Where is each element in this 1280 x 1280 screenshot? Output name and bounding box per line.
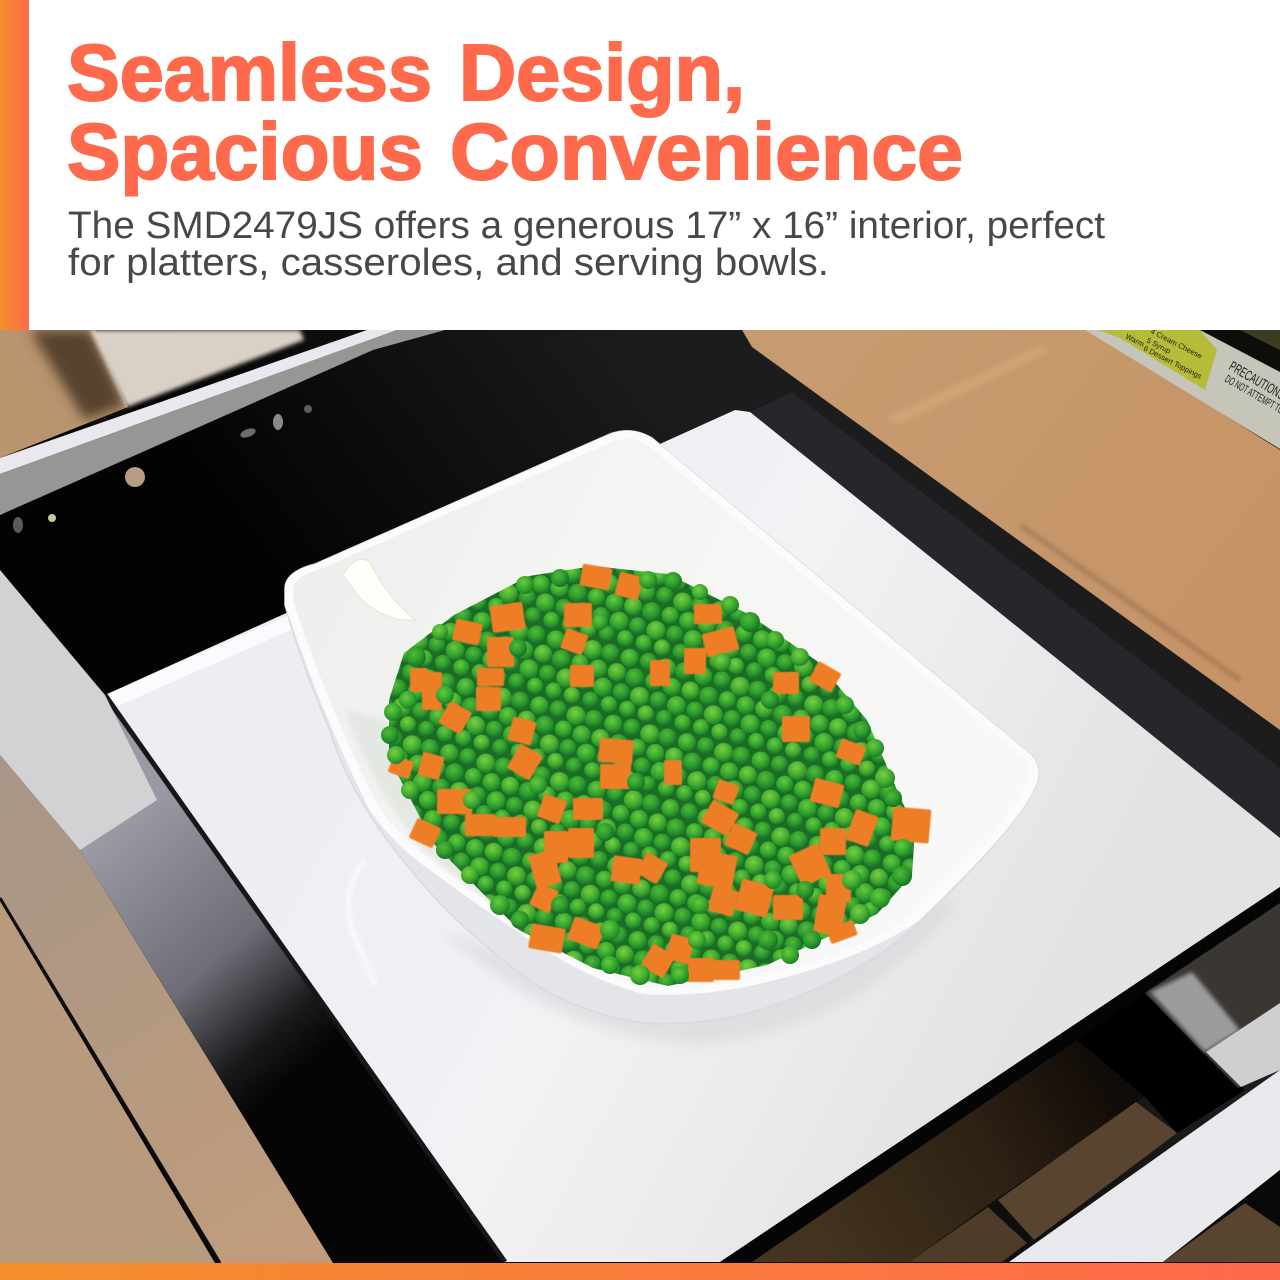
tray reflection xyxy=(348,860,375,985)
brown below drawer edge xyxy=(1163,1203,1280,1262)
bottom accent bar xyxy=(0,1263,1280,1280)
title: Spacious xyxy=(67,107,423,196)
steel rail white edge xyxy=(0,330,397,474)
steel hinge bright lower xyxy=(1206,1003,1280,1087)
blurred printing on cardboard xyxy=(1020,525,1240,680)
title: Seamless xyxy=(67,28,432,117)
yellow label xyxy=(1098,330,1217,390)
panel: brown lower xyxy=(909,1207,1027,1262)
bright steel lip xyxy=(0,570,157,850)
photo: warming drawer with bowl xyxy=(0,327,1280,1263)
left grey reflective band xyxy=(80,708,333,1106)
white object top left xyxy=(90,330,304,407)
white lower drawer edge xyxy=(1009,1070,1280,1262)
title: Design, xyxy=(459,28,745,117)
yellow label text: 5 Syrup xyxy=(1145,336,1172,356)
bowl left interior shade xyxy=(345,710,510,915)
left tan reflective face xyxy=(0,755,333,1263)
title: Convenience xyxy=(450,107,963,196)
black below drawer edge xyxy=(1163,1170,1280,1262)
yellow label text: Warm xyxy=(1124,332,1146,349)
bowl xyxy=(285,431,1039,1024)
subtitle: for platters, casseroles, and serving bowls. xyxy=(68,242,829,284)
tray top rim xyxy=(105,615,295,706)
dark right rail xyxy=(750,392,1280,840)
appliance label strip xyxy=(1085,330,1280,449)
steel rail grey face xyxy=(0,330,445,515)
label upper black band xyxy=(1200,330,1280,372)
panel: dark brown xyxy=(752,1040,1145,1262)
individual loose peas xyxy=(381,569,912,985)
wood floor top left xyxy=(0,330,128,458)
carrots xyxy=(388,564,931,982)
black gap in drawer below xyxy=(1077,993,1245,1133)
dark seam along tray xyxy=(105,695,505,1262)
peas xyxy=(389,566,915,986)
yellow label text xyxy=(1126,330,1202,379)
white tray xyxy=(105,410,1280,1262)
header background xyxy=(0,0,1280,330)
bowl rim xyxy=(285,431,1039,995)
yellow label text: 4 Cream Cheese xyxy=(1149,327,1204,361)
title xyxy=(67,28,963,196)
panel: brown middle xyxy=(998,1102,1177,1240)
bowl inner surface xyxy=(293,439,1030,987)
subtitle xyxy=(68,205,1105,284)
black seam line xyxy=(0,898,220,1263)
left accent bar xyxy=(0,0,29,330)
cardboard lining xyxy=(742,330,1280,730)
label upper olive corner xyxy=(1240,330,1280,350)
bowl outer wall xyxy=(285,431,1039,1024)
dark blur on floor xyxy=(30,330,125,420)
steel hinge base xyxy=(1145,903,1280,1088)
drawer screws xyxy=(13,405,312,533)
subtitle: The SMD2479JS offers a generous 17” x 16” interior, perfect xyxy=(68,205,1105,247)
yellow label text: 6 Dessert Toppings xyxy=(1142,344,1203,381)
lower left wood floor xyxy=(0,901,215,1263)
cardboard light streak xyxy=(892,348,1044,422)
bowl highlight xyxy=(343,559,415,620)
drawer interior background xyxy=(0,330,1280,1263)
lower dark stripe xyxy=(720,887,1280,1262)
steel hinge grey blur xyxy=(1150,972,1240,1052)
bowl shadow on tray xyxy=(440,900,960,1045)
